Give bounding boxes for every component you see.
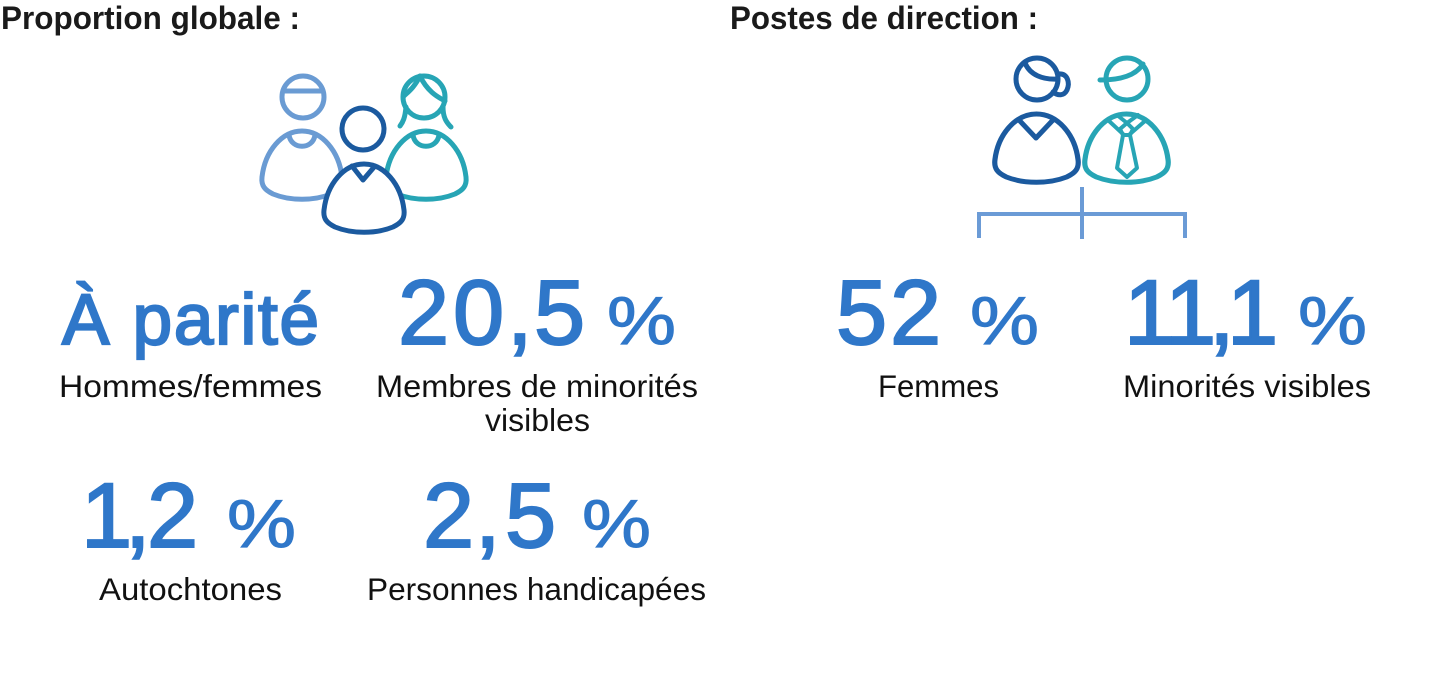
heading: postes de direction: Postes de direction :	[730, 0, 1038, 36]
icon: group of three people	[262, 76, 466, 232]
label: Membres de minorités	[376, 368, 698, 404]
percent sign: %	[607, 283, 676, 359]
percent sign: %	[582, 486, 651, 562]
bracket connector	[979, 187, 1185, 239]
percent sign: %	[1298, 283, 1367, 359]
value: 20,5	[398, 262, 585, 364]
person: centre	[324, 108, 404, 232]
person: woman	[995, 58, 1078, 182]
label: Autochtones	[99, 571, 282, 607]
heading: proportion globale: Proportion globale :	[1, 0, 300, 36]
stat: minorites visibles	[376, 262, 698, 438]
panel: postes de direction	[730, 0, 1371, 404]
stat: minorites visibles direction	[1123, 262, 1371, 404]
label: Hommes/femmes	[59, 368, 322, 404]
stat: femmes	[836, 262, 1039, 404]
value: 1,2	[81, 465, 198, 567]
person: right woman	[386, 76, 466, 199]
person: man with tie	[1085, 58, 1168, 182]
value: 11,1	[1124, 262, 1278, 364]
label: Femmes	[878, 368, 999, 404]
label: Minorités visibles	[1123, 368, 1371, 404]
stat: personnes handicapees	[367, 465, 706, 607]
label second line: visibles	[485, 402, 590, 438]
stat: parite	[59, 281, 322, 404]
person: left man	[262, 76, 342, 199]
value: À parité	[62, 281, 319, 360]
percent sign: %	[970, 283, 1039, 359]
value: 52	[836, 262, 941, 364]
value: 2,5	[423, 465, 556, 567]
label: Personnes handicapées	[367, 571, 706, 607]
stat: autochtones	[81, 465, 296, 607]
icon: two people with bracket	[995, 58, 1168, 182]
panel: proportion globale	[1, 0, 706, 607]
percent sign: %	[227, 486, 296, 562]
